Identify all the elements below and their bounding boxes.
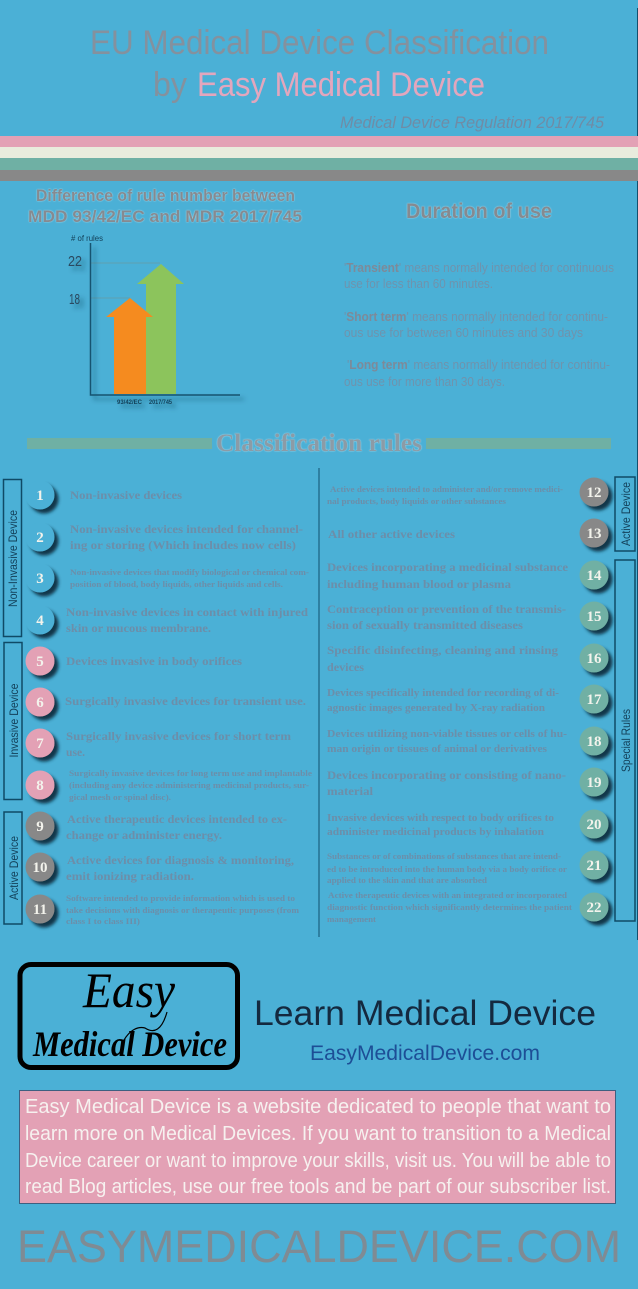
rule 2: ing or storing (Which includes now cells): [70, 538, 296, 552]
about panel: Device career or want to improve your skills, visit us. You will be able to: [25, 1150, 611, 1172]
heading: difference of rule number: Difference of rule number between: [36, 186, 295, 205]
rule 21: applied to the skin and that are absorbed: [327, 876, 488, 885]
rule 16: 16: [586, 651, 602, 667]
rule 6: Surgically invasive devices for transient use.: [65, 694, 306, 708]
duration definitions: [344, 261, 614, 389]
rule 8: 8: [36, 778, 44, 794]
duration definitions: ous use for more than 30 days.: [344, 375, 505, 389]
subtitle: Medical Device Regulation 2017/745: [340, 113, 605, 132]
rule 11: Software intended to provide information which is used to: [66, 894, 295, 903]
rule 4: 4: [36, 613, 44, 629]
rule 7: use.: [66, 745, 85, 759]
rule 7: [26, 728, 291, 759]
rule 3: [26, 564, 309, 592]
rule 9: [26, 812, 287, 842]
heading: difference of rule number: MDD 93/42/EC and MDR 2017/745: [28, 207, 302, 226]
about panel: Easy Medical Device is a website dedicated to people that want to: [25, 1096, 611, 1118]
category label: invasive device: Invasive Device: [7, 683, 21, 758]
rule 1: Non-invasive devices: [70, 488, 182, 502]
rule 1: 1: [36, 488, 44, 504]
rule 17: agnostic images generated by X-ray radiation: [327, 703, 545, 714]
rule 22: 22: [586, 900, 602, 916]
heading: difference of rule number: [28, 186, 302, 226]
rule 10: emit ionizing radiation.: [66, 869, 194, 883]
footer url: EASYMEDICALDEVICE.COM: [17, 1221, 621, 1272]
rule 20: [327, 810, 608, 838]
chart: number of rules: 22: [68, 253, 82, 270]
website link: EasyMedicalDevice.com: [310, 1042, 540, 1065]
category label: active device left: [4, 812, 22, 924]
title: EU Medical Device Classification: [90, 24, 549, 62]
rule 7: 7: [36, 736, 44, 752]
rule 16: [327, 643, 608, 674]
rule 11: [26, 894, 299, 926]
heading: classification rules: [27, 430, 611, 457]
rule 9: 9: [36, 819, 44, 835]
rule 3: 3: [36, 571, 44, 587]
rule 16: Specific disinfecting, cleaning and rinsing: [327, 643, 558, 657]
rule 13: 13: [586, 526, 602, 542]
rule 15: [327, 602, 608, 632]
about panel: learn more on Medical Devices. If you want to transition to a Medical: [25, 1123, 611, 1145]
rule 9: change or administer energy.: [66, 828, 222, 842]
category label: special rules: Special Rules: [619, 709, 633, 772]
chart: number of rules: [68, 234, 240, 406]
rule 1: [26, 480, 182, 510]
rule 16: devices: [327, 660, 364, 674]
category label: active device right: Active Device: [619, 482, 633, 546]
rule 2: 2: [36, 530, 44, 546]
rule 18: man origin or tissues of animal or derivatives: [327, 744, 547, 755]
rule 15: 15: [586, 609, 602, 625]
rule 2: Non-invasive devices intended for channel-: [70, 522, 303, 536]
rule 14: including human blood or plasma: [327, 577, 511, 591]
rule 11: class I to class III): [66, 917, 140, 926]
rule 10: Active devices for diagnosis & monitoring,: [67, 853, 294, 867]
rule 4: Non-invasive devices in contact with injured: [66, 605, 308, 619]
rule 21: ed to be introduced into the human body via a body orifice or: [327, 865, 568, 874]
rule 15: sion of sexually transmitted diseases: [327, 618, 523, 632]
colour stripes: [0, 136, 638, 181]
rule 3: Non-invasive devices that modify biological or chemical com-: [70, 568, 309, 577]
duration definitions: ous use for between 60 minutes and 30 days: [344, 326, 583, 340]
rule 22: [327, 891, 608, 924]
category label: active device right: [615, 477, 635, 551]
heading: duration of use: Duration of use: [406, 200, 552, 223]
rule 9: Active therapeutic devices intended to ex-: [67, 812, 287, 826]
rule 19: [327, 768, 608, 798]
category label: non-invasive device: [4, 480, 22, 636]
rule 20: Invasive devices with respect to body orifices to: [327, 813, 554, 824]
rule 11: 11: [33, 902, 47, 918]
rule 4: skin or mucous membrane.: [66, 621, 211, 635]
rule 10: 10: [32, 860, 48, 876]
category label: non-invasive device: Non-Invasive Device: [6, 510, 20, 607]
rule 17: 17: [586, 692, 602, 708]
rule 13: [328, 518, 608, 548]
rule 7: Surgically invasive devices for short term: [66, 729, 291, 743]
rule 22: management: [327, 915, 376, 924]
rule 22: Active therapeutic devices with an integrated or incorporated: [328, 891, 568, 900]
rule 17: Devices specifically intended for recording of di-: [327, 688, 560, 699]
rule 17: [327, 684, 608, 714]
title: by: [153, 66, 187, 104]
about panel: [20, 1090, 616, 1204]
chart: number of rules: 93/42/EC: [117, 400, 143, 406]
logo: Easy Medical Device: Easy: [82, 962, 176, 1018]
rule 14: Devices incorporating a medicinal substance: [327, 560, 569, 574]
rule 8: [26, 769, 313, 802]
duration definitions: use for less than 60 minutes.: [344, 277, 493, 291]
rule 21: [327, 850, 608, 885]
rule 19: 19: [586, 775, 602, 791]
heading: learn medical device: Learn Medical Device: [254, 994, 596, 1033]
rule 21: 21: [586, 858, 602, 874]
logo: Easy Medical Device: Medical Device: [32, 1024, 227, 1064]
rule 19: material: [327, 784, 374, 798]
rule 5: 5: [36, 654, 44, 670]
rule 8: Surgically invasive devices for long term use and implantable: [69, 769, 313, 778]
rule 12: [327, 478, 608, 506]
rule 22: diagnostic function which significantly determines the patient: [327, 903, 572, 912]
rule 6: 6: [36, 695, 44, 711]
chart: number of rules: 2017/745: [149, 400, 173, 406]
rule 8: gical mesh or spinal disc).: [69, 793, 171, 802]
rule 13: All other active devices: [328, 527, 455, 541]
rule 15: Contraception or prevention of the transmis-: [327, 602, 566, 616]
rule 11: take decisions with diagnosis or therapeutic purposes (from: [66, 906, 299, 915]
rule 5: Devices invasive in body orifices: [66, 654, 242, 668]
rule 18: 18: [586, 734, 602, 750]
rule 12: nal products, body liquids or other substances: [327, 497, 506, 506]
rule 3: position of blood, body liquids, other liquids and cells.: [70, 580, 283, 589]
logo: Easy Medical Device: [20, 962, 238, 1068]
title: [90, 24, 549, 104]
rule 14: [327, 560, 608, 591]
rule 5: [26, 646, 242, 676]
rule 2: [26, 522, 303, 552]
rule 12: 12: [586, 485, 602, 501]
chart: number of rules: 18: [69, 291, 80, 308]
category label: active device left: Active Device: [7, 836, 21, 900]
rule 18: Devices utilizing non-viable tissues or cells of hu-: [327, 729, 568, 740]
chart: number of rules: # of rules: [71, 234, 103, 243]
about panel: read Blog articles, use our free tools and be part of our subscriber list.: [25, 1176, 611, 1198]
rule 10: [26, 852, 294, 883]
rule 6: [26, 688, 306, 716]
rule 19: Devices incorporating or consisting of nano-: [327, 768, 566, 782]
rule 8: (including any device administering medicinal products, sur-: [69, 781, 309, 790]
category label: invasive device: [4, 642, 22, 800]
rule 12: Active devices intended to administer and/or remove medici-: [330, 485, 563, 494]
rule 20: administer medicinal products by inhalation: [327, 827, 544, 838]
title: Easy Medical Device: [197, 66, 485, 104]
rule 21: Substances or of combinations of substances that are intend-: [327, 852, 561, 861]
rule 18: [327, 726, 608, 756]
rule 14: 14: [586, 568, 602, 584]
duration definitions: 'Long term' means normally intended for continu-: [347, 358, 610, 372]
rule 20: 20: [586, 817, 602, 833]
category label: special rules: [615, 560, 635, 921]
duration definitions: 'Short term' means normally intended for continu-: [344, 310, 608, 324]
heading: classification rules: Classification rules: [216, 430, 422, 457]
duration definitions: 'Transient' means normally intended for continuous: [344, 261, 614, 275]
rule 4: [26, 605, 308, 635]
